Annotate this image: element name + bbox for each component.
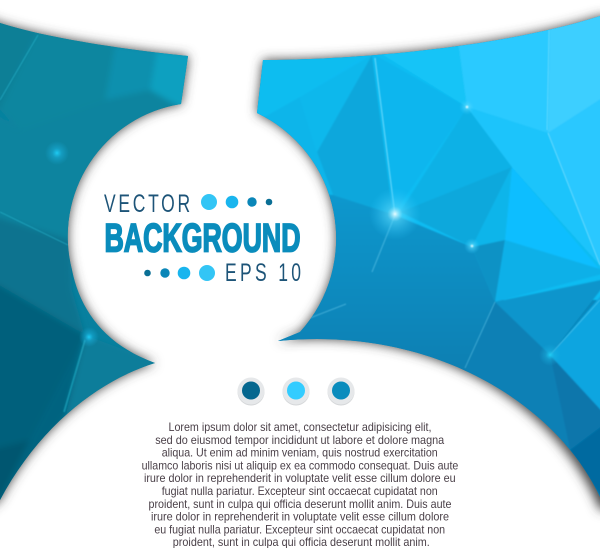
panel: left teal polygon mesh (0, 23, 188, 500)
icon: mid blue button (328, 378, 354, 406)
light streaks right (310, 30, 600, 368)
buttons row (238, 378, 354, 406)
body text (142, 420, 459, 548)
dots: top row (201, 194, 272, 210)
heading: VECTOR: VECTOR (104, 189, 190, 218)
glow points right (374, 194, 415, 236)
icon: dark blue button (238, 378, 264, 406)
dots: bottom row (144, 265, 215, 281)
body text: Lorem ipsum dolor sit amet, consectetur adipisicing elit, (168, 420, 432, 434)
body text: eu fugiat nulla pariatur. Excepteur sint occaecat cupidatat non (154, 522, 445, 536)
icon: light blue button (282, 378, 310, 406)
body text: irure dolor in reprehenderit in voluptate velit esse cillum dolore (151, 510, 449, 524)
body text: proident, sunt in culpa qui officia deserunt mollit anim. Duis aute (148, 497, 452, 511)
body text: sed do eiusmod tempor incididunt ut labore et dolore magna (155, 433, 444, 447)
body text: fugiat nulla pariatur. Excepteur sint occaecat cupidatat non (162, 484, 438, 498)
body text: irure dolor in reprehenderit in voluptate velit esse cillum dolore eu (144, 471, 456, 485)
title block (104, 189, 301, 287)
heading: EPS 10: EPS 10 (225, 258, 301, 287)
panel: right blue polygon mesh (257, 16, 600, 497)
light streaks left (0, 35, 85, 412)
glow points left (47, 143, 67, 163)
heading: BACKGROUND: BACKGROUND (104, 216, 300, 260)
body text: ullamco laboris nisi ut aliquip ex ea commodo consequat. Duis aute (142, 458, 459, 472)
body text: aliqua. Ut enim ad minim veniam, quis nostrud exercitation (162, 446, 438, 460)
